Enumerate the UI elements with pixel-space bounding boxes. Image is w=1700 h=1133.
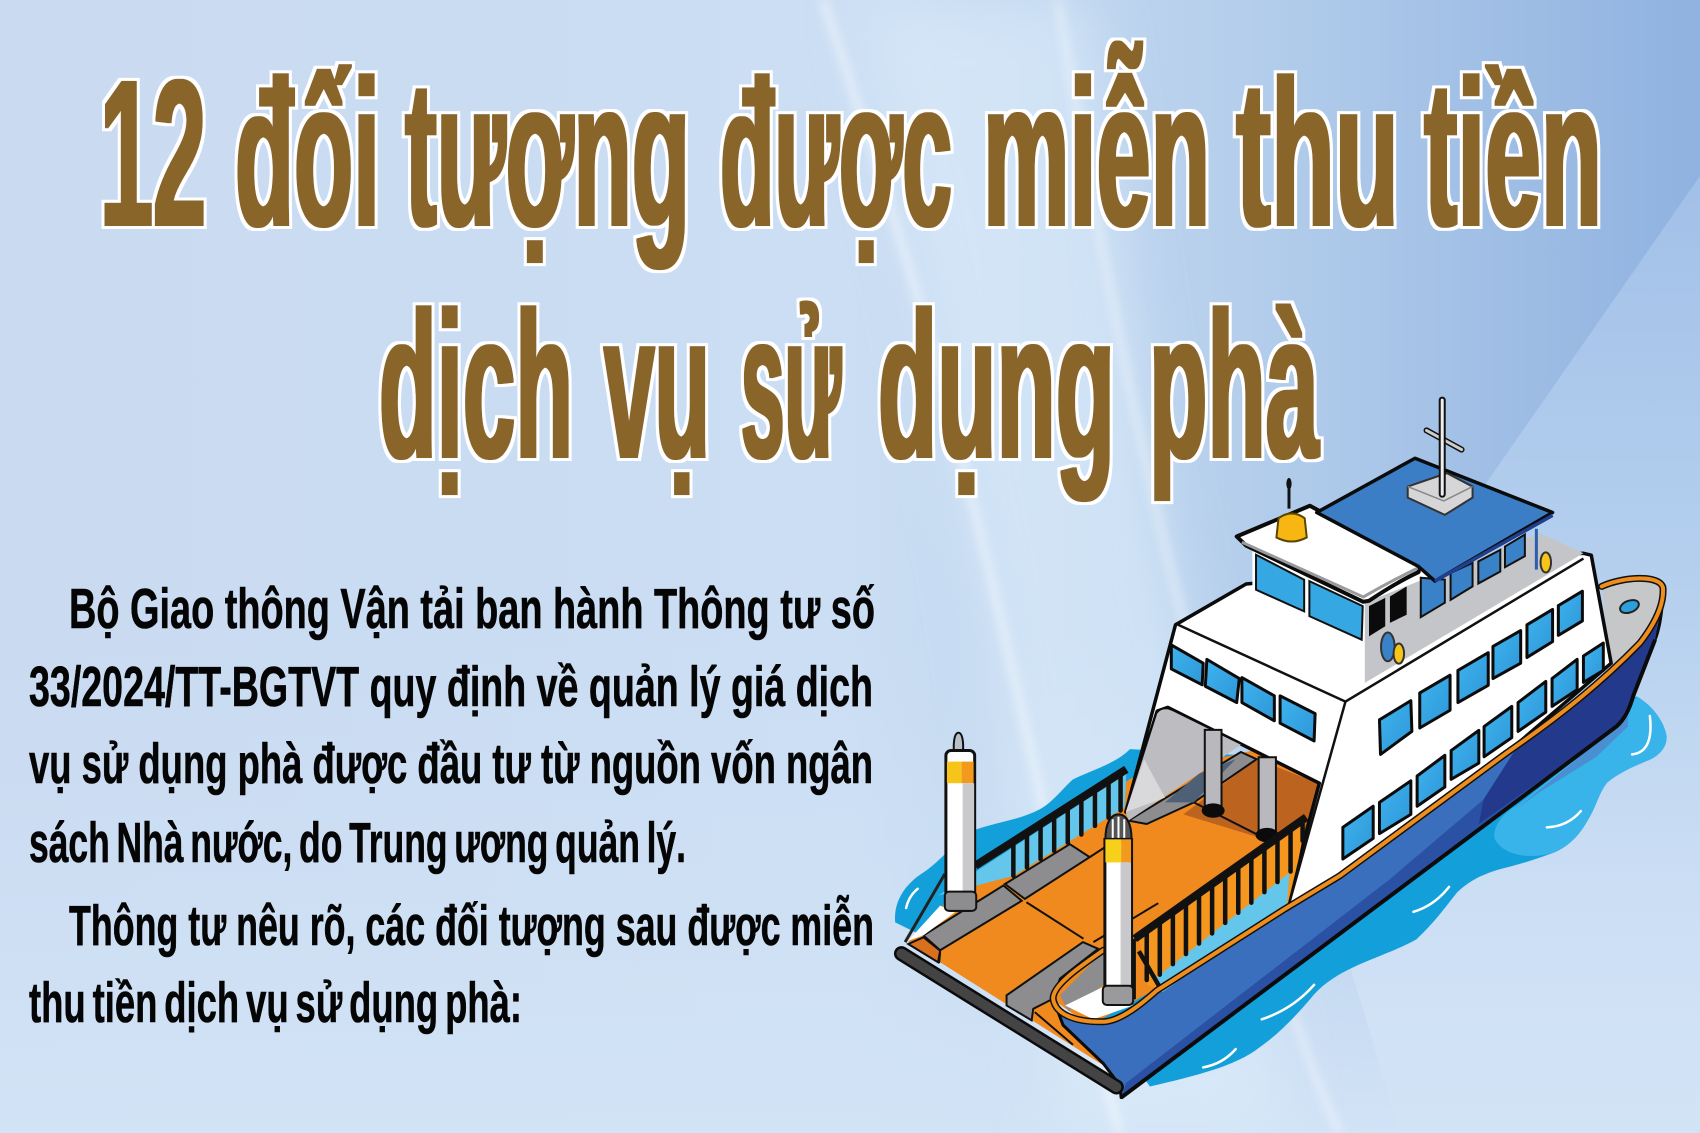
title: vụ [604,270,710,502]
front windows [1171,645,1315,741]
title: phà [1149,270,1320,502]
front bumper bar [901,954,1116,1087]
intro text block: vụ sử dụng phà được đầu tư từ nguồn vốn ngân [29,732,873,796]
intro text block: thu tiền dịch vụ sử dụng phà: [29,971,522,1035]
bollard left [945,733,976,911]
title: miễn [983,38,1210,270]
deck [905,750,1319,1072]
left railing [938,769,1126,896]
side windows lower row [1343,643,1603,859]
right railing [1134,817,1306,999]
blue roof [1317,458,1553,581]
title: đối [235,38,380,270]
title [100,38,1602,502]
hull rim [1053,578,1663,1022]
bollard right [1103,814,1133,1005]
illustration: ferry on water [895,400,1667,1098]
intro text block: Bộ Giao thông Vận tải ban hành Thông tư số [69,577,875,641]
title: được [720,38,952,270]
hull [1053,587,1663,1098]
porthole [1618,597,1641,616]
mast [1408,400,1473,515]
side windows upper row [1379,591,1582,754]
wheelhouse roof [1237,506,1419,602]
beacon light [1276,478,1307,542]
support columns [1202,730,1279,842]
title: sử [741,270,841,502]
intro text block: Thông tư nêu rõ, các đối tượng sau được miễn [69,894,874,958]
intro text block: sách Nhà nước, do Trung ương quản lý. [29,811,686,875]
intro text block: 33/2024/TT-BGTVT quy định về quản lý giá dịch [29,655,873,719]
bow interior [1602,578,1662,668]
title: thu [1236,38,1399,270]
superstructure [1126,533,1611,908]
title: 12 [100,38,206,270]
intro text block [29,577,875,1035]
title: dụng [878,270,1115,502]
title: tượng [405,38,690,270]
title: dịch [379,270,573,502]
wheelhouse [1252,529,1536,642]
lifebuoys [1381,552,1551,664]
water [895,696,1667,1087]
roof edge [1435,515,1553,581]
